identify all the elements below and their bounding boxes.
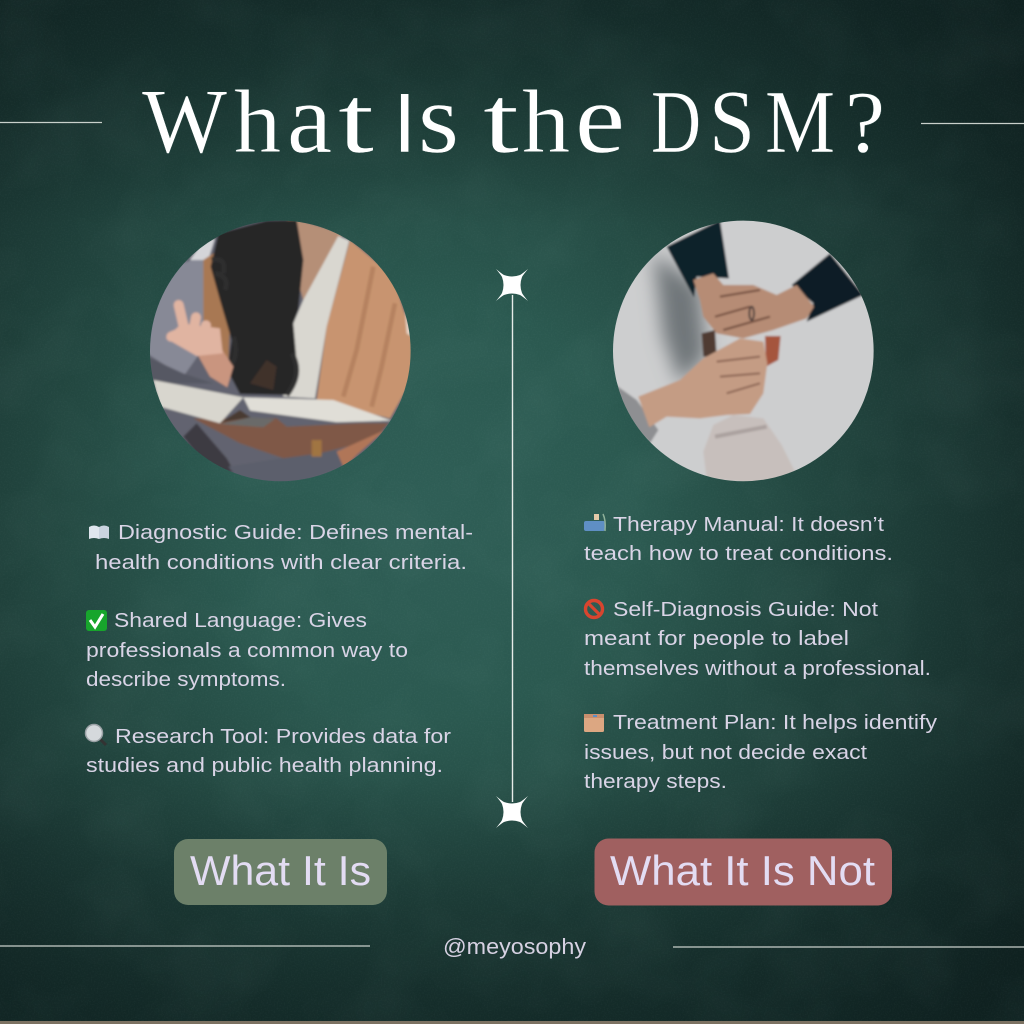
panel: what it is not text: Treatment Plan: It helps identify: [613, 712, 937, 734]
button: What It Is: [174, 839, 387, 905]
photo: stacked hands: [613, 220, 874, 482]
panel: what it is text: professionals a common way to: [86, 640, 408, 662]
icon: clipboard folder: [584, 714, 604, 732]
icon: open book: [89, 526, 109, 539]
title: What Is the DSM?: [142, 63, 885, 174]
button: What It Is Not: [594, 838, 892, 906]
panel: what it is text: Research Tool: Provides data for: [115, 726, 451, 748]
icon: green check: [86, 610, 107, 631]
title: What Is the DSM?: M: [765, 73, 835, 172]
panel: what it is not text: themselves without a professional.: [584, 658, 931, 680]
panel: what it is not text: meant for people to label: [584, 628, 849, 650]
panel: what it is not text: Therapy Manual: It doesn’t: [613, 514, 885, 536]
title: What Is the DSM?: h: [234, 73, 281, 172]
handle: @meyosophy: @meyosophy: [443, 934, 586, 959]
panel: what it is text: Shared Language: Gives: [114, 610, 367, 632]
title: What Is the DSM?: I: [393, 76, 416, 170]
button: What It Is: What It Is: [190, 847, 371, 894]
panel: what it is text: Diagnostic Guide: Defines mental-: [118, 522, 473, 544]
panel: what it is not text: [584, 514, 937, 793]
photo: person reading a book: [150, 220, 411, 482]
panel: what it is text: studies and public health planning.: [86, 755, 443, 777]
title: What Is the DSM?: S: [709, 73, 755, 172]
divider with stars: [496, 269, 528, 828]
icon: magnifier: [86, 724, 106, 745]
panel: what it is text: describe symptoms.: [86, 669, 286, 691]
panel: what it is not text: Self-Diagnosis Guide: Not: [613, 599, 879, 621]
panel: what it is text: [86, 522, 473, 777]
title: What Is the DSM?: D: [651, 73, 701, 172]
panel: what it is text: health conditions with clear criteria.: [95, 552, 467, 574]
title: What Is the DSM?: e: [575, 63, 625, 174]
panel: what it is not text: teach how to treat conditions.: [584, 543, 893, 565]
title: What Is the DSM?: s: [418, 63, 459, 174]
icon: top star: [496, 269, 528, 301]
panel: what it is not text: issues, but not decide exact: [584, 742, 867, 764]
title: What Is the DSM?: W: [142, 70, 227, 172]
title: What Is the DSM?: h: [522, 73, 570, 172]
icon: bottom star: [496, 796, 528, 828]
button: What It Is Not: What It Is Not: [610, 847, 875, 894]
panel: what it is not text: therapy steps.: [584, 771, 727, 793]
title: What Is the DSM?: ?: [845, 75, 885, 172]
icon: prohibited: [586, 600, 602, 618]
title: What Is the DSM?: t: [483, 66, 519, 173]
title: What Is the DSM?: a: [287, 63, 332, 174]
icon: couch: [584, 514, 605, 531]
title: What Is the DSM?: t: [338, 66, 374, 173]
